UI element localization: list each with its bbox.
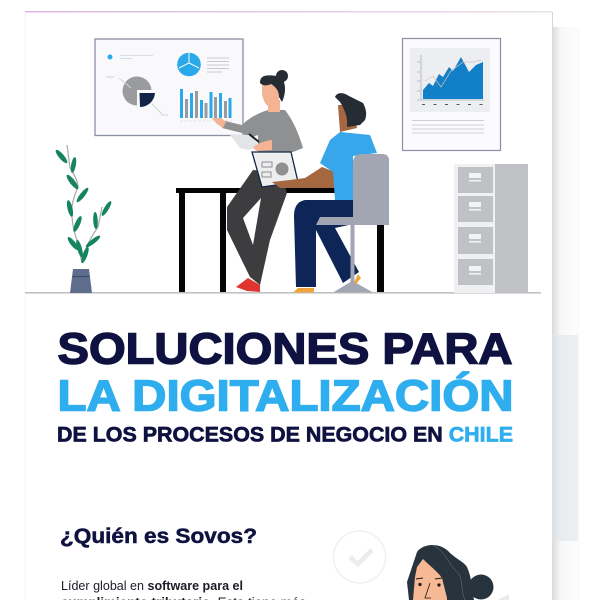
- shoes: [293, 274, 361, 292]
- man figure: [272, 93, 389, 292]
- shirt: [320, 132, 377, 200]
- hand on clipboard: [253, 140, 272, 151]
- plant: [54, 145, 113, 293]
- icon: check circle: [334, 531, 386, 583]
- back page: [552, 27, 579, 600]
- hand pointing: [212, 118, 226, 128]
- chair back front: [353, 154, 389, 218]
- chair stem and base: [333, 225, 373, 292]
- bun: [276, 70, 288, 82]
- trousers: [227, 170, 287, 285]
- clipboard: [230, 135, 260, 150]
- hair: [335, 93, 366, 127]
- bar chart: [180, 89, 232, 121]
- blue pie chart: [177, 53, 229, 76]
- decorative check: [498, 594, 509, 600]
- eyes and nose: [416, 578, 442, 598]
- laptop: [252, 152, 298, 187]
- arm: [272, 167, 335, 188]
- shoe: [236, 278, 260, 292]
- woman figure: [212, 70, 303, 292]
- table: [176, 188, 384, 292]
- title line 1: SOLUCIONES PARA: [58, 324, 512, 374]
- title line 3: DE LOS PROCESOS DE NEGOCIO EN CHILE: [57, 423, 513, 447]
- floor line: [25, 292, 541, 294]
- hair: [260, 75, 285, 102]
- whiteboard: [95, 39, 243, 136]
- section heading: ¿Quién es Sovos?: [60, 525, 257, 548]
- framed area chart poster: [402, 38, 500, 150]
- body text: Líder global en software para el: [61, 579, 243, 593]
- woman portrait: [407, 545, 494, 600]
- filing cabinet: [454, 164, 528, 293]
- neck and head: [338, 105, 357, 132]
- gray pie chart: [106, 76, 168, 115]
- pot: [70, 269, 92, 293]
- chair back: [353, 154, 389, 223]
- title line 2: LA DIGITALIZACIÓN: [58, 370, 514, 420]
- hair strands: [432, 545, 465, 600]
- chair seat: [316, 217, 389, 225]
- title: [57, 324, 514, 447]
- neck: [268, 100, 280, 112]
- legs: [294, 200, 359, 287]
- arm and sweater: [222, 110, 303, 152]
- body text: [61, 579, 306, 600]
- face: [262, 82, 279, 107]
- face: [413, 559, 447, 600]
- legend dot: [108, 54, 153, 60]
